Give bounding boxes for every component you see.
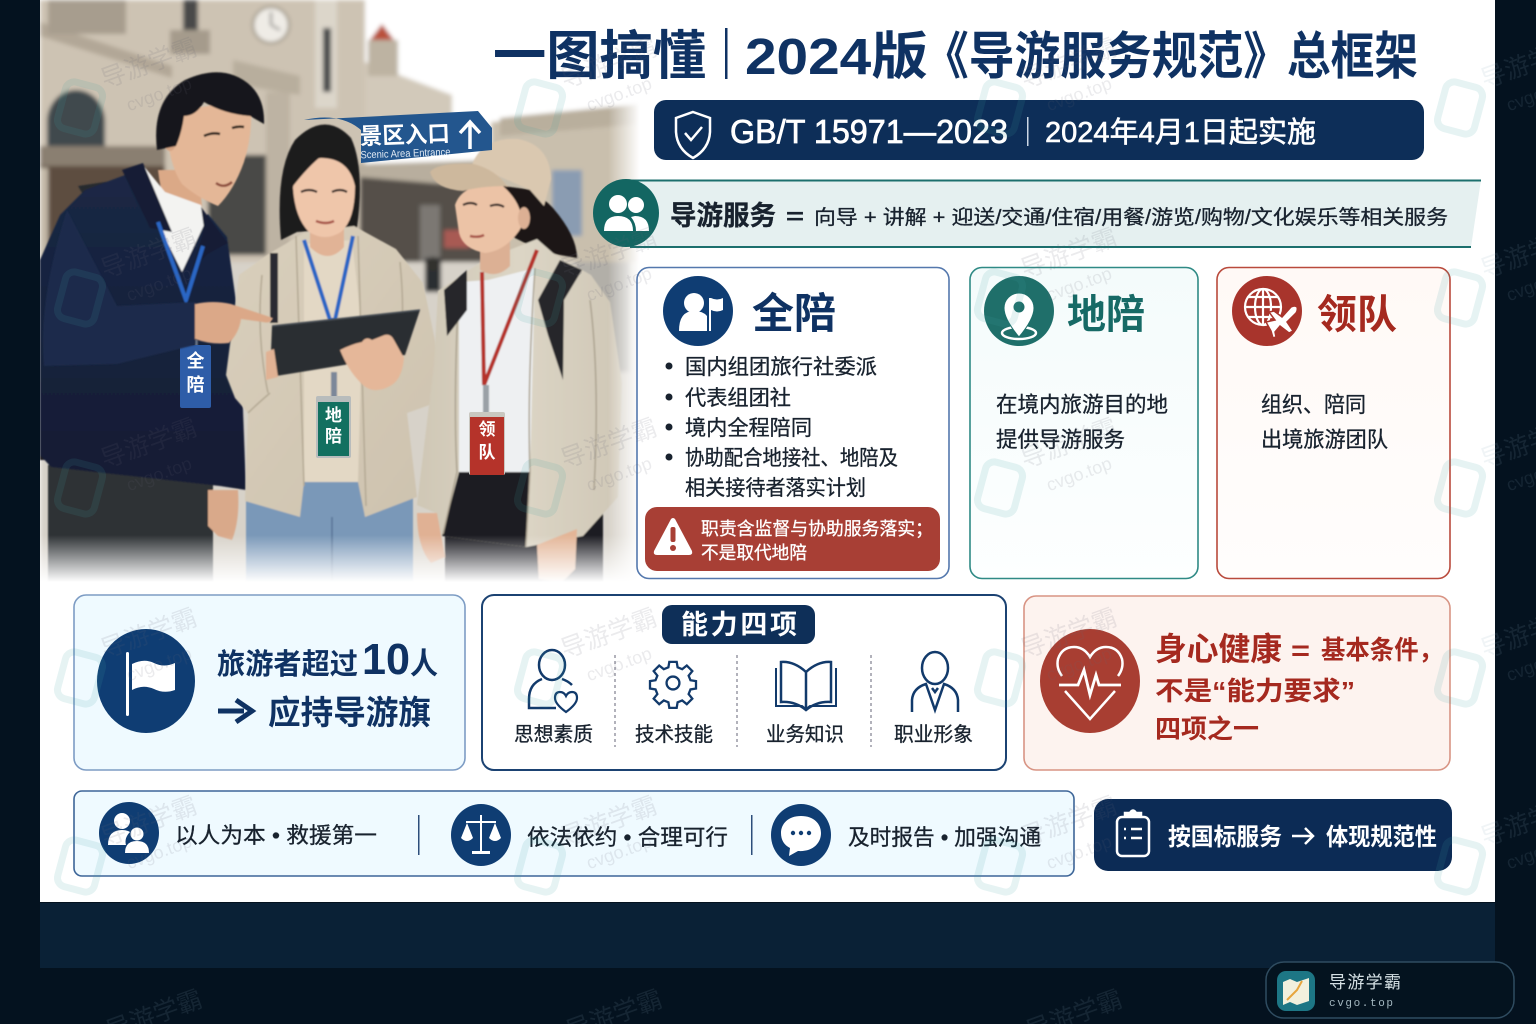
panel: guide flag rule: 人	[410, 648, 438, 681]
watermarks: 导游学霸	[1017, 791, 1121, 852]
panel: guide flag rule: 应持导游旗	[268, 694, 431, 731]
panel: service principles strip: 及时报告 • 加强沟通	[848, 825, 1041, 850]
panel: 地陪: 在境内旅游目的地	[996, 393, 1168, 417]
badge: 领队: 队	[478, 443, 496, 462]
watermarks: cvgo.top	[1044, 263, 1114, 305]
icon: brand map	[1277, 971, 1315, 1011]
icon: professional in suit	[912, 652, 958, 712]
duty list: 协助配合地接社、地陪及	[685, 447, 898, 470]
panel: 全陪	[637, 268, 949, 578]
duty list: 相关接待者落实计划	[685, 477, 866, 500]
panel: 能力四项: 职业形象	[894, 723, 973, 746]
title: 一图搞懂	[493, 27, 706, 86]
panel: service principles strip: 依法依约 • 合理可行	[527, 825, 728, 850]
badge: 领队: 领	[478, 420, 496, 439]
watermarks: cvgo.top	[584, 453, 654, 495]
definition band: 导游服务	[593, 179, 1481, 247]
icon: person with heart	[529, 650, 577, 712]
watermarks: cvgo.top	[584, 73, 654, 115]
panel: 领队: 出境旅游团队	[1261, 428, 1388, 452]
watermarks: 导游学霸	[97, 413, 201, 474]
icon: flag	[126, 652, 175, 716]
watermarks: 导游学霸	[1017, 603, 1121, 664]
standard banner: GB/T 15971—2023: GB/T 15971—2023	[730, 113, 1008, 150]
icon: gear	[650, 662, 696, 708]
icon: shield check	[676, 112, 710, 158]
brand badge: 导游学霸 cvgo.top: cvgo.top	[1329, 998, 1393, 1010]
standard banner: GB/T 15971—2023	[654, 100, 1424, 160]
icon: globe and plane	[1245, 289, 1297, 338]
sign: scenic area entrance: 景区入口	[359, 120, 450, 149]
sign: scenic area entrance: Scenic Area Entrance	[360, 146, 451, 161]
icon: heart with pulse	[1058, 647, 1122, 719]
badge: 全陪: 全	[186, 350, 204, 371]
photo: three tour guides consulting a tablet at a scenic area entrance	[40, 0, 640, 585]
watermarks: cvgo.top	[1044, 453, 1114, 495]
watermarks: cvgo.top	[124, 643, 194, 685]
button: national standard service: 按国标服务	[1168, 824, 1282, 851]
icon: people	[108, 813, 149, 853]
watermarks: 导游学霸	[1017, 223, 1121, 284]
person: woman in cap with badge	[417, 139, 622, 585]
panel: 领队: 组织、陪同	[1261, 393, 1366, 417]
panel: guide flag rule: 10	[362, 635, 410, 684]
watermarks: 导游学霸	[557, 33, 661, 94]
panel: guide flag rule: 旅游者超过	[217, 648, 358, 681]
panel: 身心健康: =	[1291, 635, 1310, 666]
watermarks: cvgo.top	[124, 73, 194, 115]
watermarks: cvgo.top	[1044, 643, 1114, 685]
panel: 身心健康: 身心健康	[1155, 631, 1282, 667]
standard banner: GB/T 15971—2023: 2024年4月1日起实施	[1045, 116, 1316, 149]
watermarks: cvgo.top	[1044, 831, 1114, 873]
badge: 领队	[469, 412, 505, 475]
icon: clipboard	[1117, 810, 1149, 856]
watermarks: 导游学霸	[1017, 33, 1121, 94]
person: man in navy jacket with badge	[40, 72, 264, 585]
icon: scales	[461, 815, 501, 854]
brand badge: 导游学霸 cvgo.top: 导游学霸	[1329, 973, 1401, 992]
badge: 全陪: 陪	[186, 375, 204, 395]
panel: 能力四项: 技术技能	[635, 723, 713, 746]
panel: 领队: 领队	[1317, 293, 1397, 337]
panel: service principles strip: 以人为本 • 救援第一	[175, 823, 377, 848]
callout: warning: 不是取代地陪	[701, 543, 807, 563]
panel: guide flag rule	[74, 595, 465, 770]
title: 《导游服务规范》	[923, 28, 1289, 85]
lower navy band	[40, 903, 1495, 968]
watermarks: 导游学霸	[557, 223, 661, 284]
definition band: 导游服务: 向导 + 讲解 + 迎送/交通/住宿/用餐/游览/购物/文化娱乐等相关服务	[814, 206, 1448, 229]
icon: speech bubble	[781, 816, 821, 856]
panel: 身心健康	[1024, 596, 1450, 770]
heading pill: 能力四项	[681, 610, 797, 640]
callout: warning	[645, 507, 940, 571]
panel: 地陪: 提供导游服务	[996, 428, 1125, 452]
watermarks: 导游学霸	[97, 791, 201, 852]
panel: 领队	[1217, 268, 1450, 578]
duty list	[666, 356, 898, 500]
panel: 身心健康: 基本条件，	[1321, 635, 1443, 665]
definition band: 导游服务: =	[786, 204, 804, 229]
title: 总框架	[1287, 28, 1418, 85]
tablet	[266, 310, 420, 390]
heading pill	[662, 605, 815, 644]
watermarks: cvgo.top	[124, 263, 194, 305]
definition band: 导游服务: 导游服务	[670, 201, 776, 231]
watermarks: 导游学霸	[557, 603, 661, 664]
watermarks: 导游学霸	[97, 603, 201, 664]
panel: 能力四项: 业务知识	[766, 723, 844, 746]
duty list: 代表组团社	[685, 387, 791, 410]
watermarks: cvgo.top	[124, 831, 194, 873]
title: 2024版	[745, 28, 928, 85]
icon: open book	[776, 662, 836, 710]
watermarks: 导游学霸	[97, 223, 201, 284]
panel: 全陪: 全陪	[752, 290, 836, 337]
watermarks: cvgo.top	[584, 643, 654, 685]
badge: 全陪	[180, 345, 211, 408]
watermarks: 导游学霸	[557, 791, 661, 852]
icon: warning triangle	[654, 518, 692, 555]
panel: 地陪: 地陪	[1067, 293, 1145, 337]
duty list: 国内组团旅行社委派	[685, 356, 877, 379]
watermarks: cvgo.top	[1044, 73, 1114, 115]
button: national standard service: 体现规范性	[1326, 824, 1437, 851]
watermarks: cvgo.top	[124, 453, 194, 495]
title	[493, 27, 1418, 86]
panel: 地陪	[970, 268, 1198, 578]
panel: 身心健康: 不是“能力要求”	[1155, 676, 1355, 706]
sign: scenic area entrance	[304, 111, 492, 163]
person: woman in centre with tablet and badge	[226, 124, 440, 585]
badge: 地陪: 地	[325, 406, 342, 425]
arrow	[218, 700, 252, 722]
panel: 能力四项	[482, 595, 1006, 770]
watermarks: cvgo.top	[584, 263, 654, 305]
man's pointing arm and hand	[43, 210, 273, 366]
duty list: 境内全程陪同	[685, 417, 812, 440]
brand badge: 导游学霸 cvgo.top	[1266, 962, 1514, 1018]
watermarks: cvgo.top	[584, 831, 654, 873]
icon: guide with flag	[679, 293, 723, 331]
panel: service principles strip	[74, 791, 1074, 876]
callout: warning: 职责含监督与协助服务落实；	[701, 519, 933, 539]
panel: 能力四项: 思想素质	[514, 723, 593, 746]
arrow	[1292, 828, 1313, 844]
watermarks: 导游学霸	[97, 33, 201, 94]
panel: 身心健康: 四项之一	[1155, 714, 1259, 744]
badge: 地陪: 陪	[325, 427, 342, 446]
watermarks: 导游学霸	[557, 413, 661, 474]
icon: people	[604, 195, 649, 231]
watermarks: 导游学霸	[1017, 413, 1121, 474]
badge: 地陪	[316, 396, 351, 458]
icon: location pin	[1002, 293, 1036, 339]
button: national standard service	[1094, 799, 1452, 871]
